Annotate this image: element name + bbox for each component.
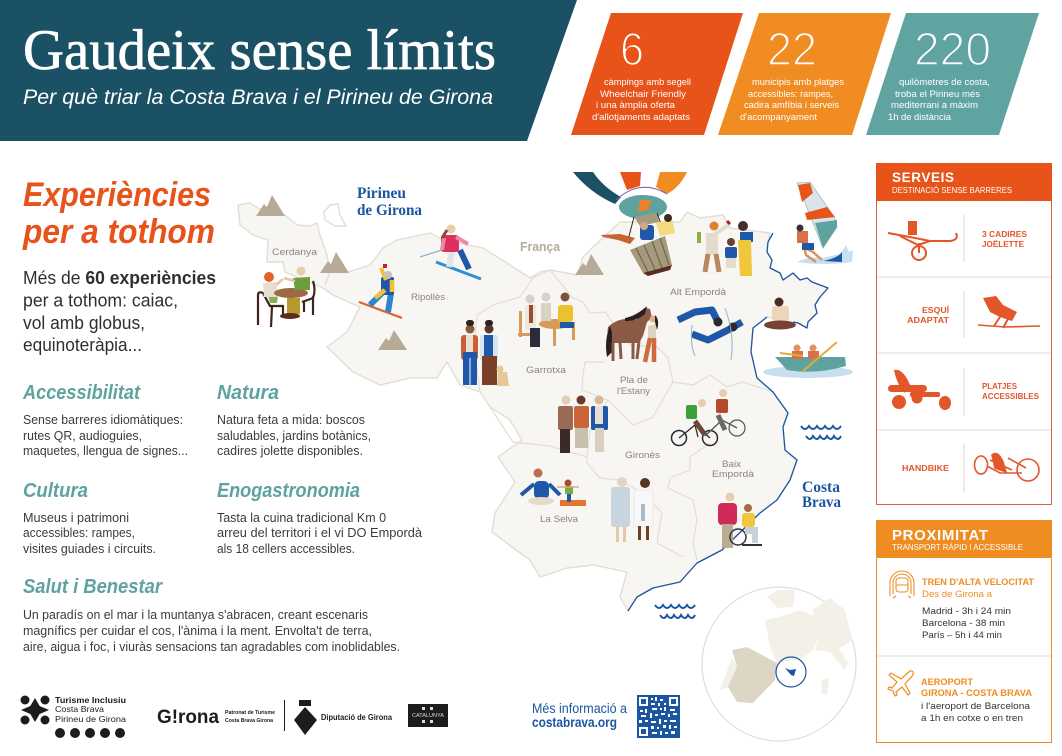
block: cultura: Museus i patrimoni bbox=[23, 511, 129, 525]
text: train: Des de Girona a bbox=[922, 589, 993, 600]
illustration: blind men with guide dog bbox=[461, 320, 509, 386]
label: esqui adaptat bbox=[907, 305, 950, 325]
text: train: París – 5h i 44 min bbox=[922, 630, 1002, 641]
illustration: meditating woman bbox=[764, 298, 796, 330]
block: accessibilitat: Accessibilitat bbox=[22, 382, 141, 404]
block: salut i benestar bbox=[23, 576, 400, 654]
stat card: 220 km bbox=[866, 13, 1039, 135]
map labels: Pla de bbox=[620, 375, 648, 386]
map labels: Baix bbox=[722, 459, 741, 470]
header banner bbox=[0, 0, 577, 141]
block: cultura: visites guiades i circuits. bbox=[23, 542, 156, 556]
icon: plane bbox=[888, 671, 913, 696]
illustration: windsurfer bbox=[796, 182, 853, 264]
label: esqui adaptat: ADAPTAT bbox=[907, 315, 950, 325]
map labels: l'Estany bbox=[617, 386, 650, 397]
map labels: Alt Empordà bbox=[670, 287, 727, 298]
text: airport: i l'aeroport de Barcelona bbox=[921, 701, 1031, 712]
text: airport bbox=[921, 677, 1032, 724]
text: train bbox=[922, 577, 1034, 641]
stat card: 6 campings: càmpings amb segell bbox=[604, 77, 691, 88]
illustration: couple at table bbox=[258, 266, 314, 327]
stat card: 6 campings: i una àmplia oferta bbox=[596, 100, 676, 111]
map labels: de Girona bbox=[357, 202, 422, 219]
map labels: Pirineu bbox=[357, 185, 406, 202]
subtitle: Per què triar la Costa Brava i el Pirineu de Girona bbox=[23, 86, 493, 109]
block: natura: saludables, jardins botànics, bbox=[217, 429, 371, 443]
illustration: tandem cyclists bbox=[672, 389, 745, 446]
illustration: horse and woman bbox=[606, 306, 658, 362]
text: train: TREN D'ALTA VELOCITAT bbox=[922, 577, 1034, 588]
panel: proximitat bbox=[876, 520, 1052, 742]
logo: turisme inclusiu: Costa Brava bbox=[55, 704, 104, 714]
logo: girona patronat: Costa Brava Girona bbox=[225, 718, 274, 724]
more information link: Més informació a bbox=[532, 701, 627, 716]
label: 3 cadires joelette: 3 CADIRES bbox=[982, 229, 1027, 239]
stat card: 22 municipis: d'acompanyament bbox=[740, 112, 817, 123]
illustration: skydivers bbox=[678, 308, 742, 360]
more information link: costabrava.org bbox=[532, 715, 617, 730]
logo: catalunya bbox=[408, 704, 448, 727]
mountain icons bbox=[256, 195, 604, 350]
stat card: 6 campings: d'allotjaments adaptats bbox=[592, 112, 690, 123]
intro text: vol amb globus, bbox=[23, 313, 145, 333]
block: accessibilitat: Sense barreres idiomàtiques: bbox=[23, 413, 183, 427]
block: accessibilitat: rutes QR, audioguies, bbox=[23, 429, 142, 443]
logo: diputacio de girona bbox=[294, 700, 392, 735]
intro text: equinoteràpia... bbox=[23, 335, 142, 355]
label: 3 cadires joelette: JOËLETTE bbox=[982, 239, 1024, 249]
logo: girona patronat: Patronat de Turisme bbox=[225, 710, 275, 716]
text: train: Madrid - 3h i 24 min bbox=[922, 606, 1011, 617]
logo: turisme inclusiu: Pirineu de Girona bbox=[55, 714, 126, 724]
block: natura bbox=[217, 382, 371, 458]
text: airport: a 1h en cotxe o en tren bbox=[921, 713, 1023, 724]
icon: joelette chair bbox=[888, 221, 957, 260]
map labels: França bbox=[520, 240, 561, 254]
map labels: Gironès bbox=[625, 450, 660, 461]
illustration: three visitors bbox=[558, 396, 608, 453]
map labels: Brava bbox=[802, 494, 841, 511]
stat card: 22 municipis bbox=[718, 13, 891, 135]
block: cultura bbox=[23, 480, 156, 556]
block: enogastronomia bbox=[217, 480, 422, 556]
panel: serveis: SERVEIS bbox=[892, 170, 954, 185]
stat card: 6 campings: 6 bbox=[620, 23, 644, 75]
block: natura: cadires jolette disponibles. bbox=[217, 444, 363, 458]
block: salut i benestar: magnífics per cuidar el cos, l'ànima i la ment. Envolta't de terra, bbox=[23, 624, 372, 638]
panel: serveis: DESTINACIÓ SENSE BARRERES bbox=[892, 186, 1012, 195]
icon: train bbox=[890, 571, 914, 598]
stat card: 22 municipis: municipis amb platges bbox=[752, 77, 844, 88]
label: platges accessibles: PLATJES bbox=[982, 381, 1017, 391]
illustration: snowboarder bbox=[359, 264, 402, 318]
stat card: 22 municipis: cadira amfíbia i serveis bbox=[744, 100, 839, 111]
block: salut i benestar: Salut i Benestar bbox=[23, 576, 163, 598]
stat card: 22 municipis: 22 bbox=[767, 23, 817, 75]
text: airport: GIRONA - COSTA BRAVA bbox=[921, 688, 1032, 699]
text: train: Barcelona - 38 min bbox=[922, 618, 1005, 629]
icon: adaptive ski bbox=[978, 296, 1040, 328]
label: esqui adaptat: ESQUÍ bbox=[922, 305, 950, 315]
title: Gaudeix sense límits bbox=[23, 19, 496, 82]
logo: diputacio de girona: Diputació de Girona bbox=[321, 712, 392, 722]
logo: girona patronat bbox=[157, 700, 285, 731]
map labels: Costa bbox=[802, 479, 840, 496]
stat card: 220 km: 1h de distància bbox=[888, 112, 952, 123]
illustration: skier bbox=[420, 224, 481, 279]
intro text: per a tothom: caiac, bbox=[23, 290, 178, 310]
logo: catalunya: CATALUNYA bbox=[412, 713, 445, 719]
stat card: 220 km: 220 bbox=[914, 23, 991, 75]
stat card: 6 campings: Wheelchair Friendly bbox=[600, 89, 686, 100]
block: accessibilitat: maquetes, llengua de signes... bbox=[23, 444, 188, 458]
locator globe bbox=[702, 587, 856, 741]
map labels: Cerdanya bbox=[272, 247, 318, 258]
stat card: 220 km: quilòmetres de costa, bbox=[899, 77, 990, 88]
heading: experiències: Experiències bbox=[23, 176, 211, 214]
icon: beach chair bbox=[888, 370, 951, 410]
stat card: 220 km: mediterrani a màxim bbox=[891, 100, 978, 111]
map of Girona comarques bbox=[238, 203, 828, 611]
block: enogastronomia: Tasta la cuina tradicional Km 0 bbox=[217, 511, 386, 525]
panel: proximitat: PROXIMITAT bbox=[892, 527, 988, 544]
illustration: friends toasting bbox=[697, 221, 753, 276]
icon: handbike bbox=[974, 454, 1039, 481]
block: salut i benestar: aire, aigua i foc, i viuràs sensacions tan agradables com inoblidables. bbox=[23, 640, 400, 654]
block: cultura: accessibles: rampes, bbox=[23, 526, 135, 540]
stat card: 6 campings bbox=[571, 13, 743, 135]
illustration: hot-air balloon bbox=[573, 172, 687, 276]
block: natura: Natura feta a mida: boscos bbox=[217, 413, 365, 427]
more information link bbox=[532, 701, 627, 730]
icon: waves east bbox=[801, 426, 841, 439]
QR code bbox=[637, 695, 680, 738]
text: airport: AEROPORT bbox=[921, 677, 973, 688]
heading: experiències: per a tothom bbox=[22, 213, 215, 251]
map labels: Empordà bbox=[712, 469, 755, 480]
block: enogastronomia: als 18 cellers accessibles. bbox=[217, 542, 355, 556]
block: natura: Natura bbox=[217, 382, 279, 404]
illustration: family yoga bbox=[521, 468, 586, 506]
label: 3 cadires joelette bbox=[982, 229, 1027, 249]
illustration: photographers with wheelchair bbox=[718, 492, 762, 548]
map labels: La Selva bbox=[540, 514, 579, 525]
label: platges accessibles bbox=[982, 381, 1039, 401]
illustration: spa guests bbox=[611, 477, 653, 542]
block: salut i benestar: Un paradís on el mar i la muntanya s'abracen, creant escenaris bbox=[23, 608, 368, 622]
label: handbike: HANDBIKE bbox=[902, 463, 949, 473]
map labels: Ripollès bbox=[411, 292, 445, 303]
block: cultura: Cultura bbox=[23, 480, 88, 502]
stat card: 22 municipis: accessibles: rampes, bbox=[748, 89, 833, 100]
block: accessibilitat bbox=[22, 382, 188, 458]
heading: experiències bbox=[22, 176, 215, 251]
logo: turisme inclusiu bbox=[20, 695, 126, 738]
illustration: kayak bbox=[763, 342, 853, 378]
panel: serveis bbox=[876, 163, 1052, 504]
icon: waves south bbox=[655, 605, 695, 618]
stat card: 220 km: troba el Pirineu més bbox=[895, 89, 980, 100]
illustration: group at table bbox=[518, 292, 575, 347]
intro text: Més de 60 experiències bbox=[23, 268, 216, 288]
block: enogastronomia: Enogastronomia bbox=[217, 480, 360, 502]
map labels: Garrotxa bbox=[526, 365, 567, 376]
intro text bbox=[23, 268, 216, 355]
block: enogastronomia: arreu del territori i el vi DO Empordà bbox=[217, 526, 422, 540]
map labels bbox=[272, 185, 841, 525]
logo: girona patronat: G!rona bbox=[157, 707, 219, 728]
panel: proximitat: TRANSPORT RÀPID I ACCESSIBLE bbox=[892, 543, 1023, 552]
label: platges accessibles: ACCESSIBLES bbox=[982, 391, 1039, 401]
logo: turisme inclusiu: Turisme Inclusiu bbox=[55, 695, 126, 705]
